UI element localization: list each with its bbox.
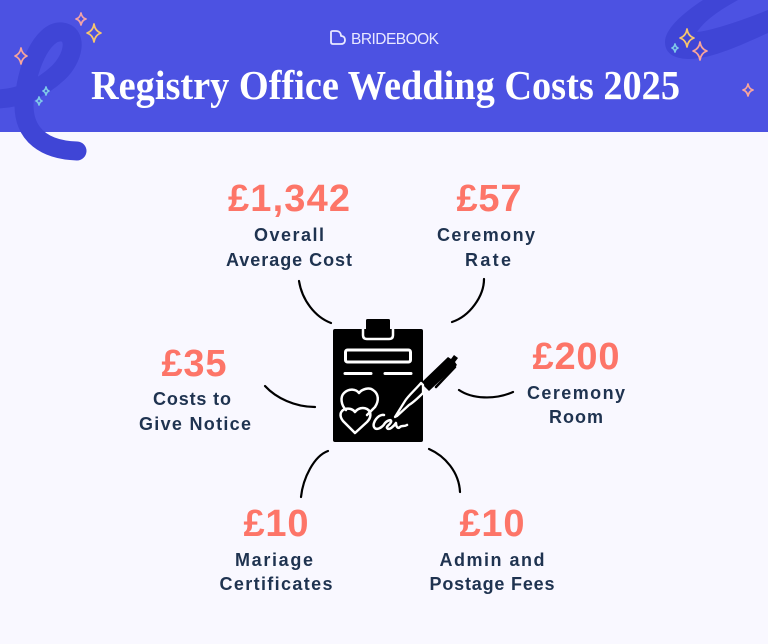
sparkles left	[15, 13, 101, 105]
stat: overall average cost: £1,342	[228, 178, 350, 220]
stat: ceremony rate: £57	[456, 178, 522, 220]
decorative ribbon right	[665, 0, 768, 59]
stat: ceremony rate	[437, 178, 535, 270]
stat: ceremony rate: Rate	[465, 250, 511, 270]
stat: admin and postage fees: £10	[460, 503, 524, 545]
stat: marriage certificates: Certificates	[220, 574, 332, 594]
header banner	[0, 0, 768, 132]
stat: ceremony room	[527, 336, 625, 427]
stat: overall average cost: Overall	[254, 225, 324, 245]
pen	[395, 355, 458, 417]
pen barrel	[421, 355, 458, 391]
stat: admin and postage fees: Admin and	[440, 550, 544, 570]
title: Registry Office Wedding Costs 2025	[91, 62, 680, 108]
stat: admin and postage fees	[430, 503, 554, 594]
stat: marriage certificates: Mariage	[235, 550, 313, 570]
decorative ribbon left	[0, 32, 77, 151]
stat: overall average cost: Average Cost	[226, 250, 352, 270]
stat: ceremony room: Room	[549, 407, 603, 427]
signature	[374, 415, 407, 429]
hearts	[341, 389, 378, 433]
stat: overall average cost	[226, 178, 352, 270]
pen clip	[436, 367, 455, 387]
stat: admin and postage fees: Postage Fees	[430, 574, 554, 594]
stat: marriage certificates: £10	[244, 503, 308, 545]
logo: Bridebook: BRIDEBOOK	[351, 31, 440, 48]
stat: costs to give notice	[139, 343, 251, 434]
stat: ceremony room: £200	[532, 336, 620, 378]
clipboard clip	[363, 319, 393, 339]
stat: costs to give notice: £35	[162, 343, 226, 385]
stat: costs to give notice: Give Notice	[139, 414, 251, 434]
connector strokes	[265, 279, 513, 497]
stat: marriage certificates	[220, 503, 332, 594]
clipboard board	[333, 329, 423, 442]
icon: clipboard with hearts and pen	[333, 319, 458, 442]
stat: ceremony rate: Ceremony	[437, 225, 535, 245]
pen nib	[395, 383, 423, 417]
sparkles right	[672, 29, 753, 96]
form lines	[345, 350, 411, 374]
stat: ceremony room: Ceremony	[527, 383, 625, 403]
stat: costs to give notice: Costs to	[153, 389, 231, 409]
